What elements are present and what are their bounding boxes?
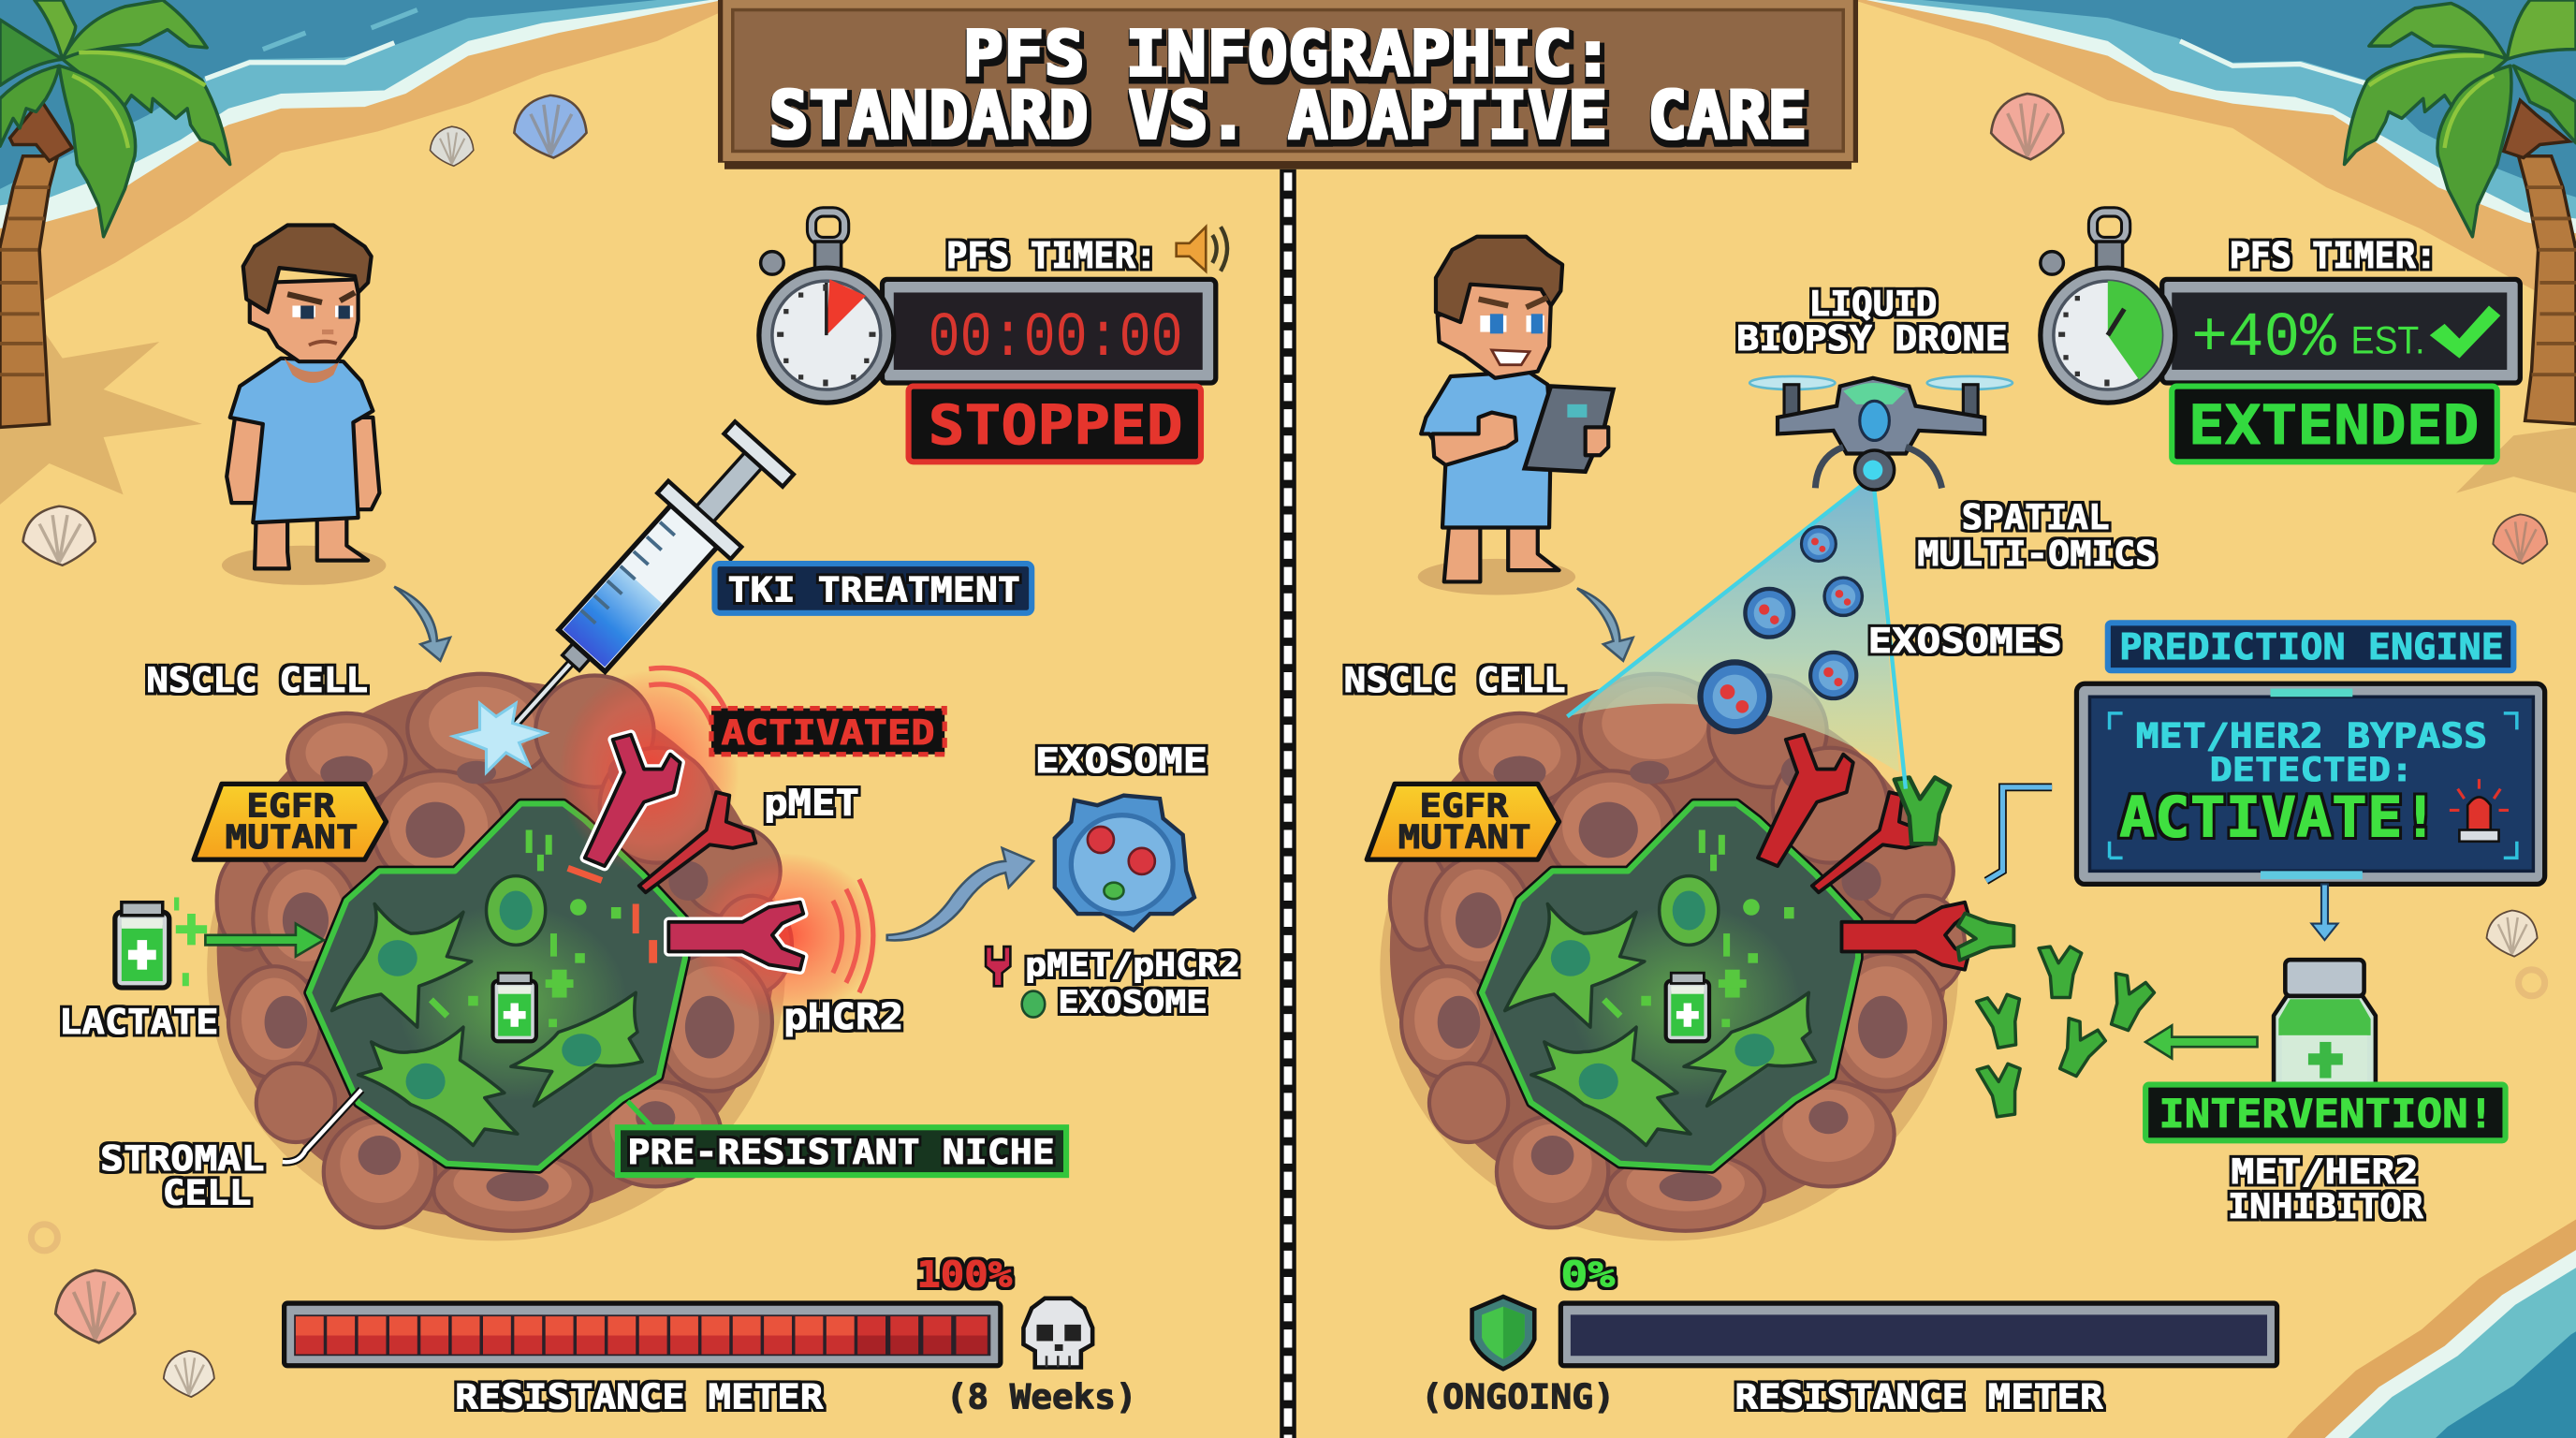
patient: standard care, worried (222, 225, 386, 585)
status: stopped (909, 387, 1201, 462)
prediction engine panel: ACTIVATE! (2119, 786, 2438, 851)
ocean: top-right shore (1853, 0, 2576, 313)
stopwatch: right, extended (2041, 212, 2520, 403)
label: PFS timer right: PFS TIMER: (2230, 235, 2437, 277)
label: 8 weeks: (8 Weeks) (946, 1376, 1137, 1416)
digital display panel (882, 279, 1216, 383)
meter value: 0% (1560, 1254, 1615, 1297)
center divider (1280, 169, 1296, 1438)
label: TKI treatment: TKI TREATMENT (728, 569, 1020, 609)
label: lactate: LACTATE (59, 1002, 218, 1042)
digital display panel with +40%: EST. (2351, 317, 2425, 361)
label: MET/HER2 inhibitor (2228, 1152, 2424, 1226)
liquid biopsy scan beam (1567, 477, 1906, 789)
connector stroke (1986, 787, 2052, 881)
label: resistance meter right: RESISTANCE METER (1734, 1376, 2103, 1416)
prediction engine panel: MET/HER2 BYPASS (2136, 716, 2487, 756)
icon: skull (1023, 1299, 1092, 1368)
palm tree: right (2345, 0, 2576, 493)
lactate battery with arrow (115, 897, 324, 988)
resistance meter: right, empty (1560, 1254, 2277, 1366)
drone (1749, 376, 2012, 490)
exosome illustration (1055, 796, 1194, 931)
title text (768, 18, 1808, 154)
label: NSCLC cell right: NSCLC CELL (1344, 660, 1566, 700)
activated receptors: left (559, 668, 881, 1018)
injection splash (453, 703, 546, 772)
status: extended: EXTENDED (2188, 393, 2479, 457)
arrow: patient to cell, right (1577, 588, 1633, 661)
label: stromal cell with leader: STROMAL (100, 1138, 265, 1179)
label: spatial multi-omics: MULTI-OMICS (1917, 534, 2157, 574)
label: pre-resistant niche: PRE-RESISTANT NICHE (627, 1132, 1055, 1172)
resistance meter: left, full (285, 1254, 1012, 1366)
title text: PFS INFOGRAPHIC: (962, 18, 1614, 91)
stopwatch: left, stopped (759, 212, 1216, 403)
label: TKI treatment (714, 564, 1032, 613)
syringe: TKI treatment (473, 415, 801, 764)
legend: pMET/pHCR2 and exosome (986, 946, 1240, 1020)
label: liquid biopsy drone (1736, 284, 2008, 359)
badge: EGFR mutant left (194, 784, 386, 859)
digital display panel with +40%: +40% (2191, 303, 2337, 374)
ocean: top-left shore (0, 0, 748, 320)
status: stopped: STOPPED (929, 393, 1183, 457)
label: pHCR2: pHCR2 (783, 996, 903, 1038)
badge: EGFR mutant left: EGFR (246, 786, 336, 825)
label: exosome: EXOSOME (1035, 741, 1208, 781)
label: MET/HER2 inhibitor: INHIBITOR (2228, 1186, 2424, 1226)
inhibitor bottle (2274, 960, 2376, 1085)
label: ongoing: (ONGOING) (1421, 1376, 1615, 1416)
tumor cluster: left, with stromal niche (207, 674, 792, 1240)
icon: shield (1472, 1297, 1534, 1369)
status: extended (2172, 387, 2497, 462)
prediction engine panel (2076, 683, 2545, 884)
ocean: bottom-right shore (2287, 1220, 2576, 1438)
label: pMET: pMET (764, 783, 859, 825)
label: liquid biopsy drone: LIQUID (1808, 284, 1937, 324)
exosomes in beam (1701, 527, 1862, 731)
label: resistance meter left: RESISTANCE METER (455, 1376, 824, 1416)
badge: EGFR mutant right: EGFR (1419, 786, 1509, 825)
label: stromal cell with leader: CELL (163, 1173, 252, 1213)
label: spatial multi-omics (1917, 497, 2157, 574)
badge: EGFR mutant right: MUTANT (1398, 818, 1531, 857)
label: MET/HER2 inhibitor: MET/HER2 (2231, 1152, 2419, 1192)
meter value: 100% (916, 1254, 1012, 1297)
connector: receptor to engine (1986, 787, 2052, 881)
label: exosomes: EXOSOMES (1868, 621, 2062, 661)
arrow: engine to inhibitor (2311, 884, 2338, 940)
digital display panel: 00:00:00 (929, 303, 1183, 374)
label: spatial multi-omics: SPATIAL (1962, 497, 2110, 537)
label: prediction engine: PREDICTION ENGINE (2119, 626, 2504, 668)
patient: adaptive care, smiling with tablet (1418, 237, 1614, 594)
badge: EGFR mutant right (1367, 784, 1559, 859)
arrow: exosome release (887, 848, 1033, 940)
title board (718, 0, 1858, 169)
label: intervention: INTERVENTION! (2159, 1091, 2494, 1137)
icon: siren (2450, 779, 2509, 842)
palm tree: left (0, 0, 230, 505)
prediction engine panel: DETECTED: (2210, 751, 2413, 789)
receptors with bound inhibitors: right (1758, 735, 2013, 970)
arrow: patient to cell, left (394, 587, 450, 661)
label: NSCLC cell left: NSCLC CELL (146, 660, 368, 700)
title text: STANDARD VS. ADAPTIVE CARE (768, 77, 1808, 154)
legend: pMET/pHCR2 and exosome: EXOSOME (1058, 983, 1208, 1020)
legend: pMET/pHCR2 and exosome: pMET/pHCR2 (1025, 946, 1240, 985)
label: activated: ACTIVATED (721, 712, 935, 753)
label: PFS timer left: PFS TIMER: (946, 235, 1157, 277)
label: stromal cell with leader (100, 1090, 361, 1213)
badge: EGFR mutant left: MUTANT (225, 818, 359, 857)
label: pre-resistant niche (618, 1101, 1066, 1175)
label: liquid biopsy drone: BIOPSY DRONE (1736, 318, 2008, 359)
arrow: bottle to inhibitor molecules (2145, 1025, 2258, 1058)
free inhibitor molecules (1976, 946, 2157, 1119)
digital display panel with +40% (2162, 279, 2520, 383)
icon: speaker (1177, 227, 1227, 271)
tumor cluster: right, with stromal niche (1380, 674, 1965, 1240)
